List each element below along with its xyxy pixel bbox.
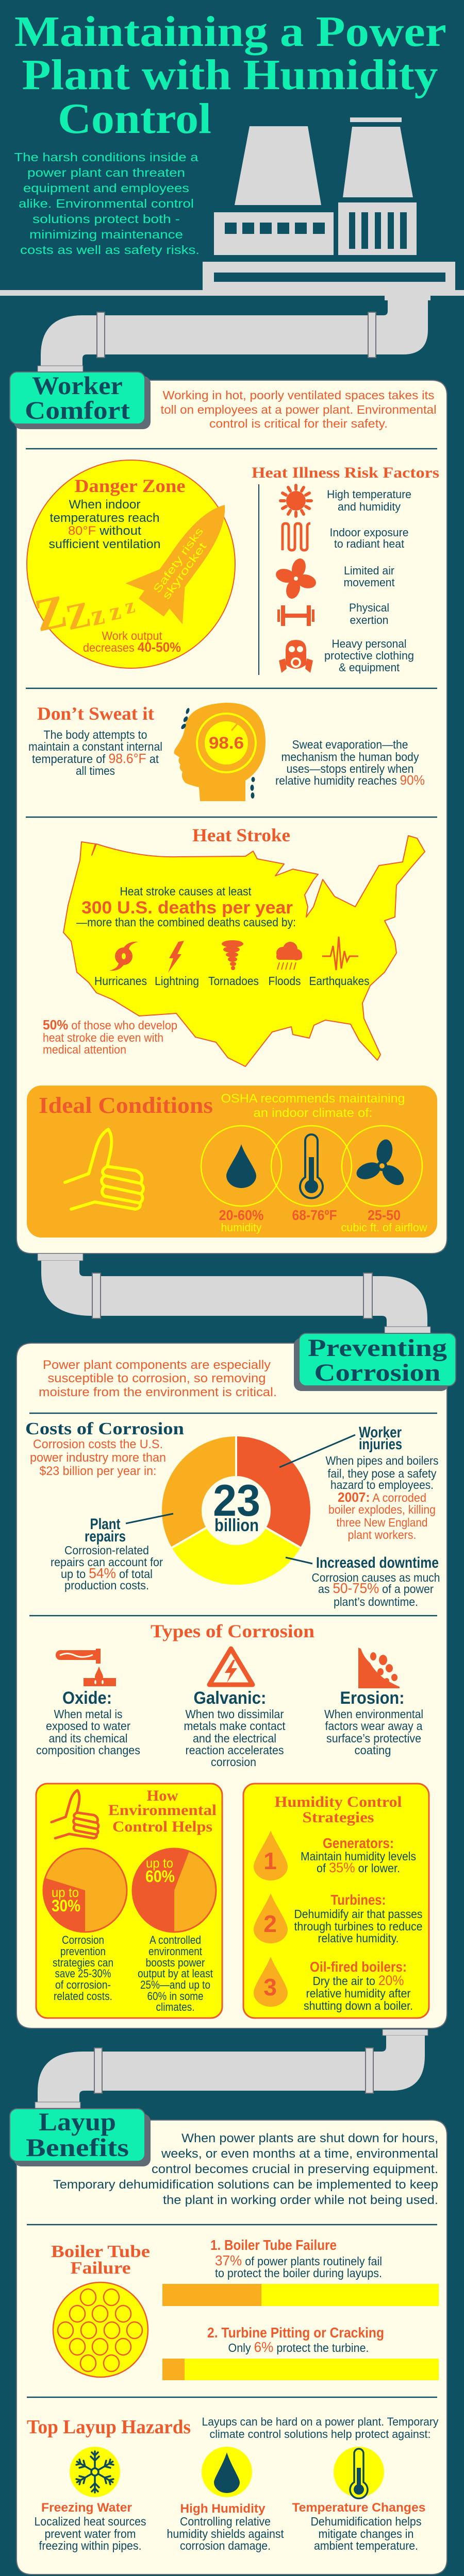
box: humidity control strategies: Turbines: — [331, 1892, 386, 1908]
callout: increased downtime: Corrosion causes as much — [311, 1571, 440, 1584]
callout: worker injuries: Worker — [359, 1424, 402, 1441]
label: layup benefits: Layup — [39, 2107, 116, 2136]
ideal conditions: an indoor climate of: — [254, 1106, 372, 1120]
types of corrosion: Oxide: — [62, 1688, 112, 1708]
icon: dumbbell — [277, 605, 314, 626]
types of corrosion: reaction accelerates — [186, 1743, 284, 1757]
icon: gas mask — [279, 640, 313, 673]
costs of corrosion: Costs of Corrosion — [25, 1419, 184, 1438]
heat stroke: Tornadoes — [208, 974, 259, 988]
icon: oxide — [56, 1649, 116, 1686]
intro paragraph: costs as well as safety risks. — [20, 243, 200, 257]
costs of corrosion: power industry more than — [30, 1451, 166, 1465]
don't sweat it: mechanism the human body — [281, 750, 419, 764]
boiler tube failure: Only 6% protect the turbine. — [228, 2339, 369, 2355]
icon: water drop — [226, 1144, 256, 1188]
box: humidity control strategies: Generators: — [323, 1835, 394, 1851]
types of corrosion: and its chemical — [48, 1732, 128, 1745]
intro paragraph — [14, 150, 200, 257]
heat illness risk factors: movement — [343, 576, 395, 589]
box: humidity control strategies: Dehumidify air that passes — [294, 1907, 423, 1921]
don't sweat it: The body attempts to — [43, 728, 147, 741]
panel: layup benefits: control becomes crucial in preserving equipment. — [152, 2162, 438, 2176]
box: how environmental control helps: How — [146, 1787, 178, 1804]
heat stroke: 300 U.S. deaths per year — [81, 898, 293, 918]
icon: erosion — [358, 1648, 400, 1688]
pipe 3 — [35, 2029, 428, 2108]
ideal conditions: 25-50 — [368, 1207, 401, 1223]
box: how environmental control helps: strategies can — [53, 1956, 113, 1969]
don't sweat it: Sweat evaporation—the — [292, 738, 408, 751]
types of corrosion: and the electrical — [193, 1732, 276, 1745]
callout: increased downtime: as 50-75% of a power — [318, 1580, 434, 1596]
don't sweat it: uses—stops entirely when — [287, 762, 413, 775]
icon: head with thermostat — [174, 703, 266, 801]
pie chart: 60%: up to — [146, 1855, 173, 1871]
worker comfort intro text: control is critical for their safety. — [209, 417, 388, 430]
boiler tube failure: to protect the boiler during layups. — [215, 2266, 382, 2280]
icon: lightning — [168, 941, 184, 973]
heat stroke: Floods — [268, 974, 301, 988]
top layup hazards: ambient temperature. — [314, 2539, 418, 2552]
heat stroke: Earthquakes — [309, 974, 369, 988]
panel: preventing corrosion — [16, 1343, 447, 2028]
title: Plant with Humidity — [22, 51, 438, 99]
costs of corrosion — [25, 1419, 440, 1608]
danger zone circle: decreases 40-50% — [83, 639, 181, 655]
icon: rocket — [123, 484, 253, 628]
danger zone circle: Danger Zone — [74, 476, 186, 496]
panel: worker comfort — [16, 380, 447, 1253]
intro paragraph: solutions protect both - — [32, 212, 180, 226]
pie chart: 30% — [43, 1849, 127, 1932]
pie chart: 30%: up to — [52, 1885, 79, 1900]
types of corrosion — [36, 1621, 423, 1769]
danger zone circle: sufficient ventilation — [48, 537, 161, 551]
heat stroke: Lightning — [155, 974, 199, 988]
callout: increased downtime: plant’s downtime. — [334, 1595, 418, 1608]
heat illness risk factors: and humidity — [338, 500, 401, 513]
top layup hazards: Top Layup Hazards — [27, 2416, 191, 2438]
title: Control — [58, 95, 211, 143]
icon: radiator — [283, 523, 310, 550]
callout: worker injuries — [326, 1424, 438, 1541]
ideal conditions: cubic ft. of airflow — [341, 1221, 427, 1234]
box: humidity control strategies: through turbines to reduce — [294, 1920, 423, 1933]
danger zone circle: When indoor — [69, 498, 141, 512]
label: layup benefits — [10, 2107, 151, 2166]
top layup hazards: corrosion damage. — [180, 2539, 271, 2552]
box: how environmental control helps: Corrosion — [62, 1934, 104, 1946]
callout: increased downtime — [311, 1554, 440, 1608]
panel: layup benefits: Temporary dehumidification solutions can be implemented to keep — [53, 2178, 438, 2192]
icon: zzz: z — [107, 597, 123, 626]
callout: plant repairs: production costs. — [64, 1579, 149, 1592]
callout: plant repairs — [51, 1516, 163, 1592]
top layup hazards: Layups can be hard on a power plant. Temporary — [202, 2415, 438, 2428]
callout: plant repairs: Corrosion-related — [64, 1544, 149, 1557]
worker comfort intro text — [161, 388, 436, 430]
top layup hazards: Temperature Changes — [292, 2501, 426, 2515]
label: worker comfort: Worker — [32, 371, 123, 400]
box: how environmental control helps: 25%—and up to — [140, 1978, 210, 1991]
costs of corrosion: billion — [214, 1516, 259, 1535]
types of corrosion: composition changes — [36, 1743, 140, 1757]
callout: worker injuries: injuries — [359, 1436, 402, 1453]
callout: worker injuries: three New England — [336, 1516, 428, 1529]
icon: rocket: skyrocket — [160, 540, 209, 602]
heat illness risk factors — [252, 464, 439, 675]
pie chart: 60% — [132, 1849, 216, 1932]
panel: layup benefits: When power plants are shut down for hours, — [181, 2131, 438, 2145]
intro paragraph: equipment and employees — [23, 181, 189, 195]
callout: plant repairs: repairs — [85, 1528, 126, 1545]
icon: thermometer — [300, 1134, 323, 1198]
box: how environmental control helps: A controlled — [150, 1934, 201, 1946]
box: how environmental control helps — [36, 1784, 222, 2018]
boiler tube failure: 37% of power plants routinely fail — [215, 2252, 382, 2268]
heat illness risk factors: to radiant heat — [334, 537, 404, 550]
callout: worker injuries: When pipes and boilers — [326, 1454, 438, 1467]
panel: layup benefits: weeks, or even months at a time, environmental — [161, 2147, 438, 2161]
heat stroke — [43, 825, 425, 1066]
title — [14, 8, 446, 143]
label: worker comfort: Comfort — [25, 396, 130, 425]
icon: drop — [214, 2452, 240, 2493]
top layup hazards: mitigate changes in — [319, 2527, 413, 2540]
box: how environmental control helps: save 25-30% — [55, 1967, 111, 1980]
types of corrosion: When two dissimilar — [186, 1707, 284, 1721]
panel: preventing corrosion: susceptible to corrosion, so removing — [47, 1371, 266, 1385]
label: worker comfort — [10, 371, 151, 429]
icon: zzz — [30, 585, 137, 641]
top layup hazards: Dehumidification helps — [310, 2515, 422, 2528]
heat stroke: Hurricanes — [94, 974, 147, 988]
don't sweat it: relative humidity reaches 90% — [275, 772, 425, 788]
heat illness risk factors: & equipment — [339, 661, 400, 674]
intro paragraph: alike. Environmental control — [19, 197, 194, 210]
callout: worker injuries: 2007: A corroded — [338, 1489, 426, 1505]
ideal conditions — [27, 1086, 437, 1238]
icon: hurricane — [109, 942, 138, 971]
don't sweat it: maintain a constant internal — [28, 740, 162, 753]
us map — [63, 836, 425, 1066]
label: preventing corrosion: Corrosion — [314, 1359, 440, 1386]
box: how environmental control helps: output by at least — [138, 1967, 213, 1980]
box: how environmental control helps: related costs. — [54, 1990, 112, 2003]
box: humidity control strategies — [243, 1784, 429, 2018]
boiler tube failure — [51, 2237, 439, 2380]
ideal conditions: OSHA recommends maintaining — [221, 1092, 405, 1106]
heat illness risk factors: Heavy personal — [332, 637, 406, 650]
danger zone circle: Work output — [102, 629, 162, 642]
callout: plant repairs: repairs can account for — [51, 1555, 163, 1569]
ideal conditions: 20-60% — [219, 1207, 264, 1223]
box: humidity control strategies: relative humidity. — [318, 1931, 399, 1945]
title: Maintaining a Power — [14, 8, 446, 56]
heat stroke: heat stroke die even with — [43, 1031, 163, 1044]
icon: zzz: z — [88, 598, 107, 632]
box: humidity control strategies: Oil-fired boilers: — [310, 1959, 407, 1975]
types of corrosion: coating — [355, 1743, 391, 1757]
heat stroke: —more than the combined deaths caused by: — [76, 916, 296, 929]
worker comfort intro text: toll on employees at a power plant. Environmental — [161, 403, 436, 416]
box: how environmental control helps: climates. — [156, 2001, 195, 2013]
donut chart — [161, 1435, 311, 1586]
bar: 6% — [162, 2359, 439, 2380]
top layup hazards: Controlling relative — [180, 2515, 271, 2528]
top layup hazards: humidity shields against — [167, 2527, 284, 2540]
top layup hazards: Freezing Water — [41, 2501, 132, 2515]
costs of corrosion: $23 billion per year in: — [39, 1464, 157, 1478]
callout: worker injuries: plant workers. — [347, 1528, 417, 1541]
icon: snowflake — [75, 2451, 115, 2493]
icon: tornado — [222, 940, 243, 970]
icon: thumbs up orange — [52, 1790, 98, 1838]
box: how environmental control helps: environment — [148, 1945, 202, 1958]
heat illness risk factors: exertion — [350, 614, 389, 626]
panel: preventing corrosion: moisture from the environment is critical. — [39, 1385, 277, 1399]
icon: thumbs up — [65, 1129, 143, 1209]
icon: head with thermostat: 98.6 — [209, 734, 244, 752]
heat illness risk factors: Limited air — [344, 564, 394, 577]
boiler tube failure: Failure — [70, 2259, 131, 2278]
don't sweat it — [28, 703, 425, 801]
box: how environmental control helps: boosts power — [145, 1956, 205, 1969]
pie chart: 60%: 60% — [145, 1867, 175, 1886]
boiler tube failure: 1. Boiler Tube Failure — [210, 2237, 337, 2253]
icon: galvanic — [209, 1649, 253, 1685]
pipe 1 — [38, 300, 428, 372]
box: humidity control strategies: 2 — [263, 1910, 277, 1937]
intro paragraph: power plant can threaten — [27, 166, 185, 179]
intro paragraph: The harsh conditions inside a — [14, 150, 198, 164]
pie chart: 30%: 30% — [52, 1896, 80, 1915]
callout: worker injuries: boiler explodes, killing — [328, 1503, 436, 1516]
ideal conditions: Ideal Conditions — [39, 1093, 213, 1118]
label: preventing corrosion: Preventing — [308, 1334, 447, 1362]
boiler tube failure: 2. Turbine Pitting or Cracking — [207, 2325, 384, 2341]
top layup hazards: Localized heat sources — [34, 2515, 146, 2528]
types of corrosion: Erosion: — [340, 1688, 404, 1708]
heat illness risk factors: Indoor exposure — [330, 526, 408, 539]
callout: worker injuries: hazard to employees. — [330, 1478, 434, 1492]
callout: worker injuries: fail, they pose a safety — [328, 1467, 437, 1480]
panel: layup benefits — [16, 2120, 447, 2574]
heat stroke: Heat Stroke — [192, 825, 290, 845]
box: how environmental control helps: Environmental — [108, 1802, 217, 1819]
boiler tube failure: Boiler Tube — [51, 2242, 150, 2261]
don't sweat it: all times — [76, 764, 115, 777]
icon: power plant factory — [0, 117, 464, 300]
icon: fan — [354, 1138, 407, 1189]
box: how environmental control helps: prevention — [60, 1945, 106, 1958]
heat stroke: Heat stroke causes at least — [120, 885, 252, 898]
box: humidity control strategies: 1 — [263, 1848, 277, 1874]
top layup hazards: freezing within pipes. — [39, 2539, 141, 2552]
box: humidity control strategies: Strategies — [302, 1809, 374, 1826]
bar: 37% — [162, 2284, 439, 2306]
icon: zzz: Z — [62, 595, 94, 638]
callout: increased downtime: Increased downtime — [316, 1554, 439, 1571]
icon: rocket: Safety risks — [151, 526, 206, 595]
types of corrosion: metals make contact — [184, 1719, 286, 1733]
box: humidity control strategies: Dry the air to 20% — [312, 1973, 404, 1988]
top layup hazards — [27, 2415, 438, 2552]
top layup hazards: High Humidity — [180, 2502, 266, 2516]
box: humidity control strategies: of 35% or lower. — [317, 1860, 400, 1875]
panel: preventing corrosion: Power plant components are especially — [43, 1358, 271, 1372]
pipe 2 — [38, 1253, 430, 1333]
types of corrosion: surface’s protective — [326, 1732, 421, 1745]
box: humidity control strategies: relative humidity after — [306, 1987, 411, 2000]
heat illness risk factors: Physical — [349, 601, 389, 614]
types of corrosion: Galvanic: — [194, 1688, 266, 1708]
top layup hazards: climate control solutions help protect against: — [209, 2428, 431, 2441]
icon: drops 1 2 3 — [254, 1831, 288, 2007]
callout: plant repairs: up to 54% of total — [61, 1565, 153, 1581]
heat illness risk factors: High temperature — [327, 488, 411, 501]
icon: flood — [276, 942, 302, 970]
types of corrosion: exposed to water — [46, 1719, 130, 1733]
costs of corrosion: 23 — [213, 1476, 260, 1526]
heat illness risk factors: Heat Illness Risk Factors — [252, 464, 439, 481]
box: humidity control strategies: shutting down a boiler. — [304, 1999, 413, 2012]
heat illness risk factors: protective clothing — [324, 649, 414, 662]
don't sweat it: Don’t Sweat it — [37, 703, 154, 724]
label: preventing corrosion — [294, 1333, 456, 1391]
box: humidity control strategies: Maintain humidity levels — [301, 1850, 416, 1863]
box: humidity control strategies: 3 — [263, 1974, 277, 2001]
panel: layup benefits: the plant in working order while not being used. — [163, 2193, 438, 2207]
types of corrosion: Types of Corrosion — [151, 1621, 314, 1641]
heat stroke: 50% of those who develop — [43, 1017, 177, 1032]
danger zone circle: 80°F without — [68, 524, 141, 538]
don't sweat it: temperature of 98.6°F at — [32, 751, 159, 766]
types of corrosion: When metal is — [54, 1707, 123, 1721]
types of corrosion: When environmental — [324, 1707, 423, 1721]
label: layup benefits: Benefits — [26, 2133, 129, 2162]
icon: fan — [274, 557, 318, 600]
icon: earthquake — [322, 937, 358, 970]
intro paragraph: minimizing maintenance — [29, 228, 183, 241]
costs of corrosion: Corrosion costs the U.S. — [33, 1437, 163, 1451]
icon: zzz: z — [123, 594, 137, 619]
heat stroke: medical attention — [43, 1043, 126, 1056]
callout: plant repairs: Plant — [90, 1516, 121, 1533]
top layup hazards: prevent water from — [44, 2527, 136, 2540]
types of corrosion: factors wear away a — [325, 1719, 423, 1733]
danger zone circle — [27, 460, 253, 668]
icon: boiler tubes — [53, 2282, 148, 2377]
icon: sun — [280, 485, 311, 516]
icon: thermometer — [350, 2449, 368, 2498]
ideal conditions: humidity — [221, 1221, 262, 1234]
worker comfort intro text: Working in hot, poorly ventilated spaces takes its — [163, 388, 434, 402]
icon: zzz: Z — [30, 585, 71, 641]
box: humidity control strategies: Humidity Control — [274, 1793, 402, 1810]
danger zone circle: temperatures reach — [49, 511, 160, 525]
types of corrosion: corrosion — [211, 1755, 256, 1769]
box: how environmental control helps: of corrosion- — [55, 1978, 111, 1991]
ideal conditions: 68-76ºF — [292, 1207, 337, 1223]
box: how environmental control helps: 60% in some — [147, 1990, 203, 2003]
box: how environmental control helps: Control Helps — [112, 1818, 212, 1835]
